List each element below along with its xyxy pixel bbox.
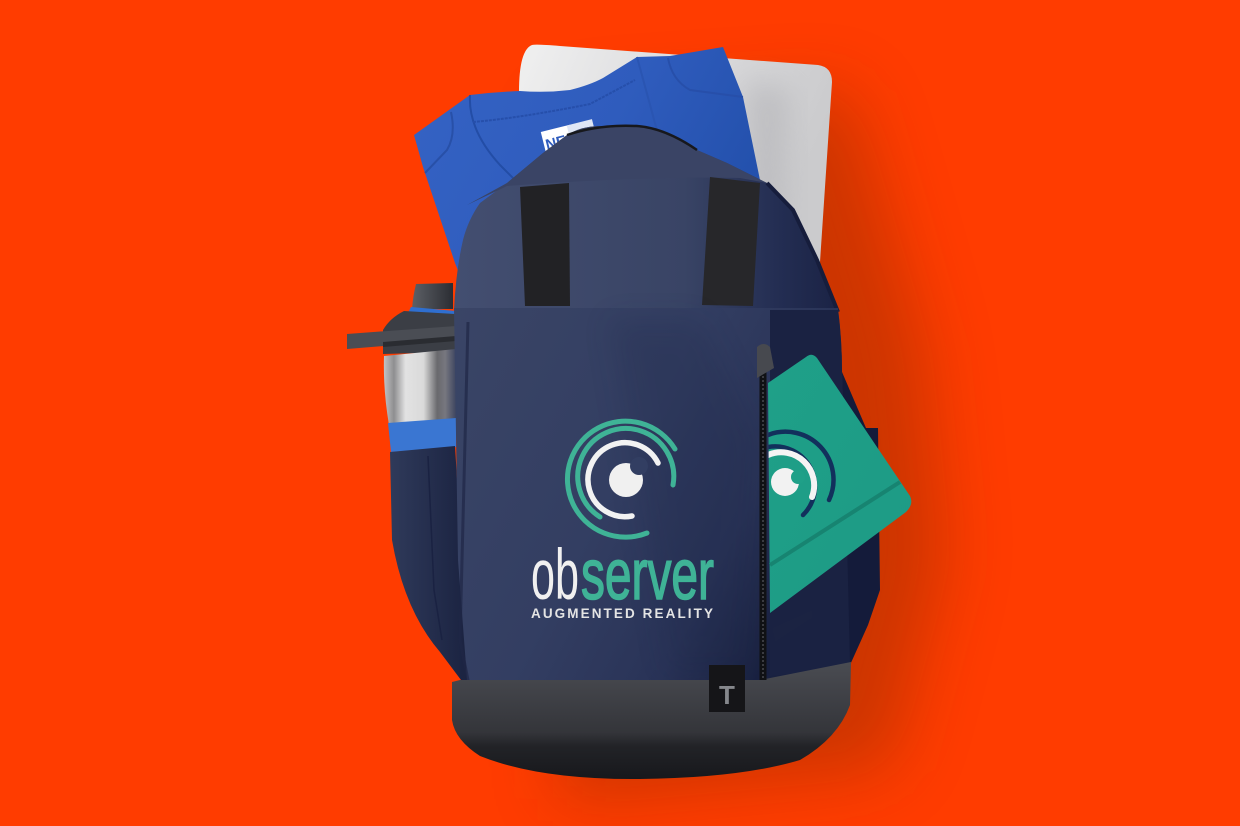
- zipper and pen: [757, 344, 812, 680]
- back body behind: [780, 300, 880, 680]
- observer logo: [531, 421, 714, 621]
- front panel: [454, 308, 850, 692]
- right piping: [767, 183, 838, 312]
- wordmark: [531, 536, 714, 615]
- bottle blue base: [388, 418, 456, 452]
- top zipper: [567, 126, 697, 150]
- top flap: [467, 126, 767, 205]
- drop shadow: [560, 90, 945, 800]
- notebook elastic band: [770, 482, 900, 565]
- t-shirt: [414, 47, 760, 300]
- wordmark: ob: [531, 536, 579, 615]
- bottle collar and handle: [347, 311, 456, 354]
- shirt neck label: [541, 119, 597, 154]
- bottom panel: [452, 662, 851, 779]
- side mesh pocket: [390, 446, 470, 692]
- illustration: backpack with branded items on an orange background: [347, 44, 974, 826]
- tagline: AUGMENTED REALITY: [531, 606, 713, 621]
- notebook logo: [768, 432, 834, 515]
- bottle steel body: [384, 349, 456, 425]
- water bottle: [347, 283, 456, 452]
- bottle cap: [412, 283, 453, 309]
- left handle strap: [520, 183, 570, 306]
- wordmark: server: [581, 536, 714, 615]
- brand tag: [709, 665, 745, 712]
- logo rings and eye: [567, 421, 675, 537]
- upper body: [454, 126, 838, 310]
- right handle strap: [702, 177, 760, 306]
- brand tag: T: [719, 680, 735, 710]
- backpack: [390, 126, 911, 779]
- shirt neck label: NE: [544, 132, 568, 154]
- right side panel: [770, 310, 850, 676]
- front pocket fold shadow: [460, 322, 470, 690]
- laptop: [519, 45, 832, 262]
- notebook: [768, 355, 911, 613]
